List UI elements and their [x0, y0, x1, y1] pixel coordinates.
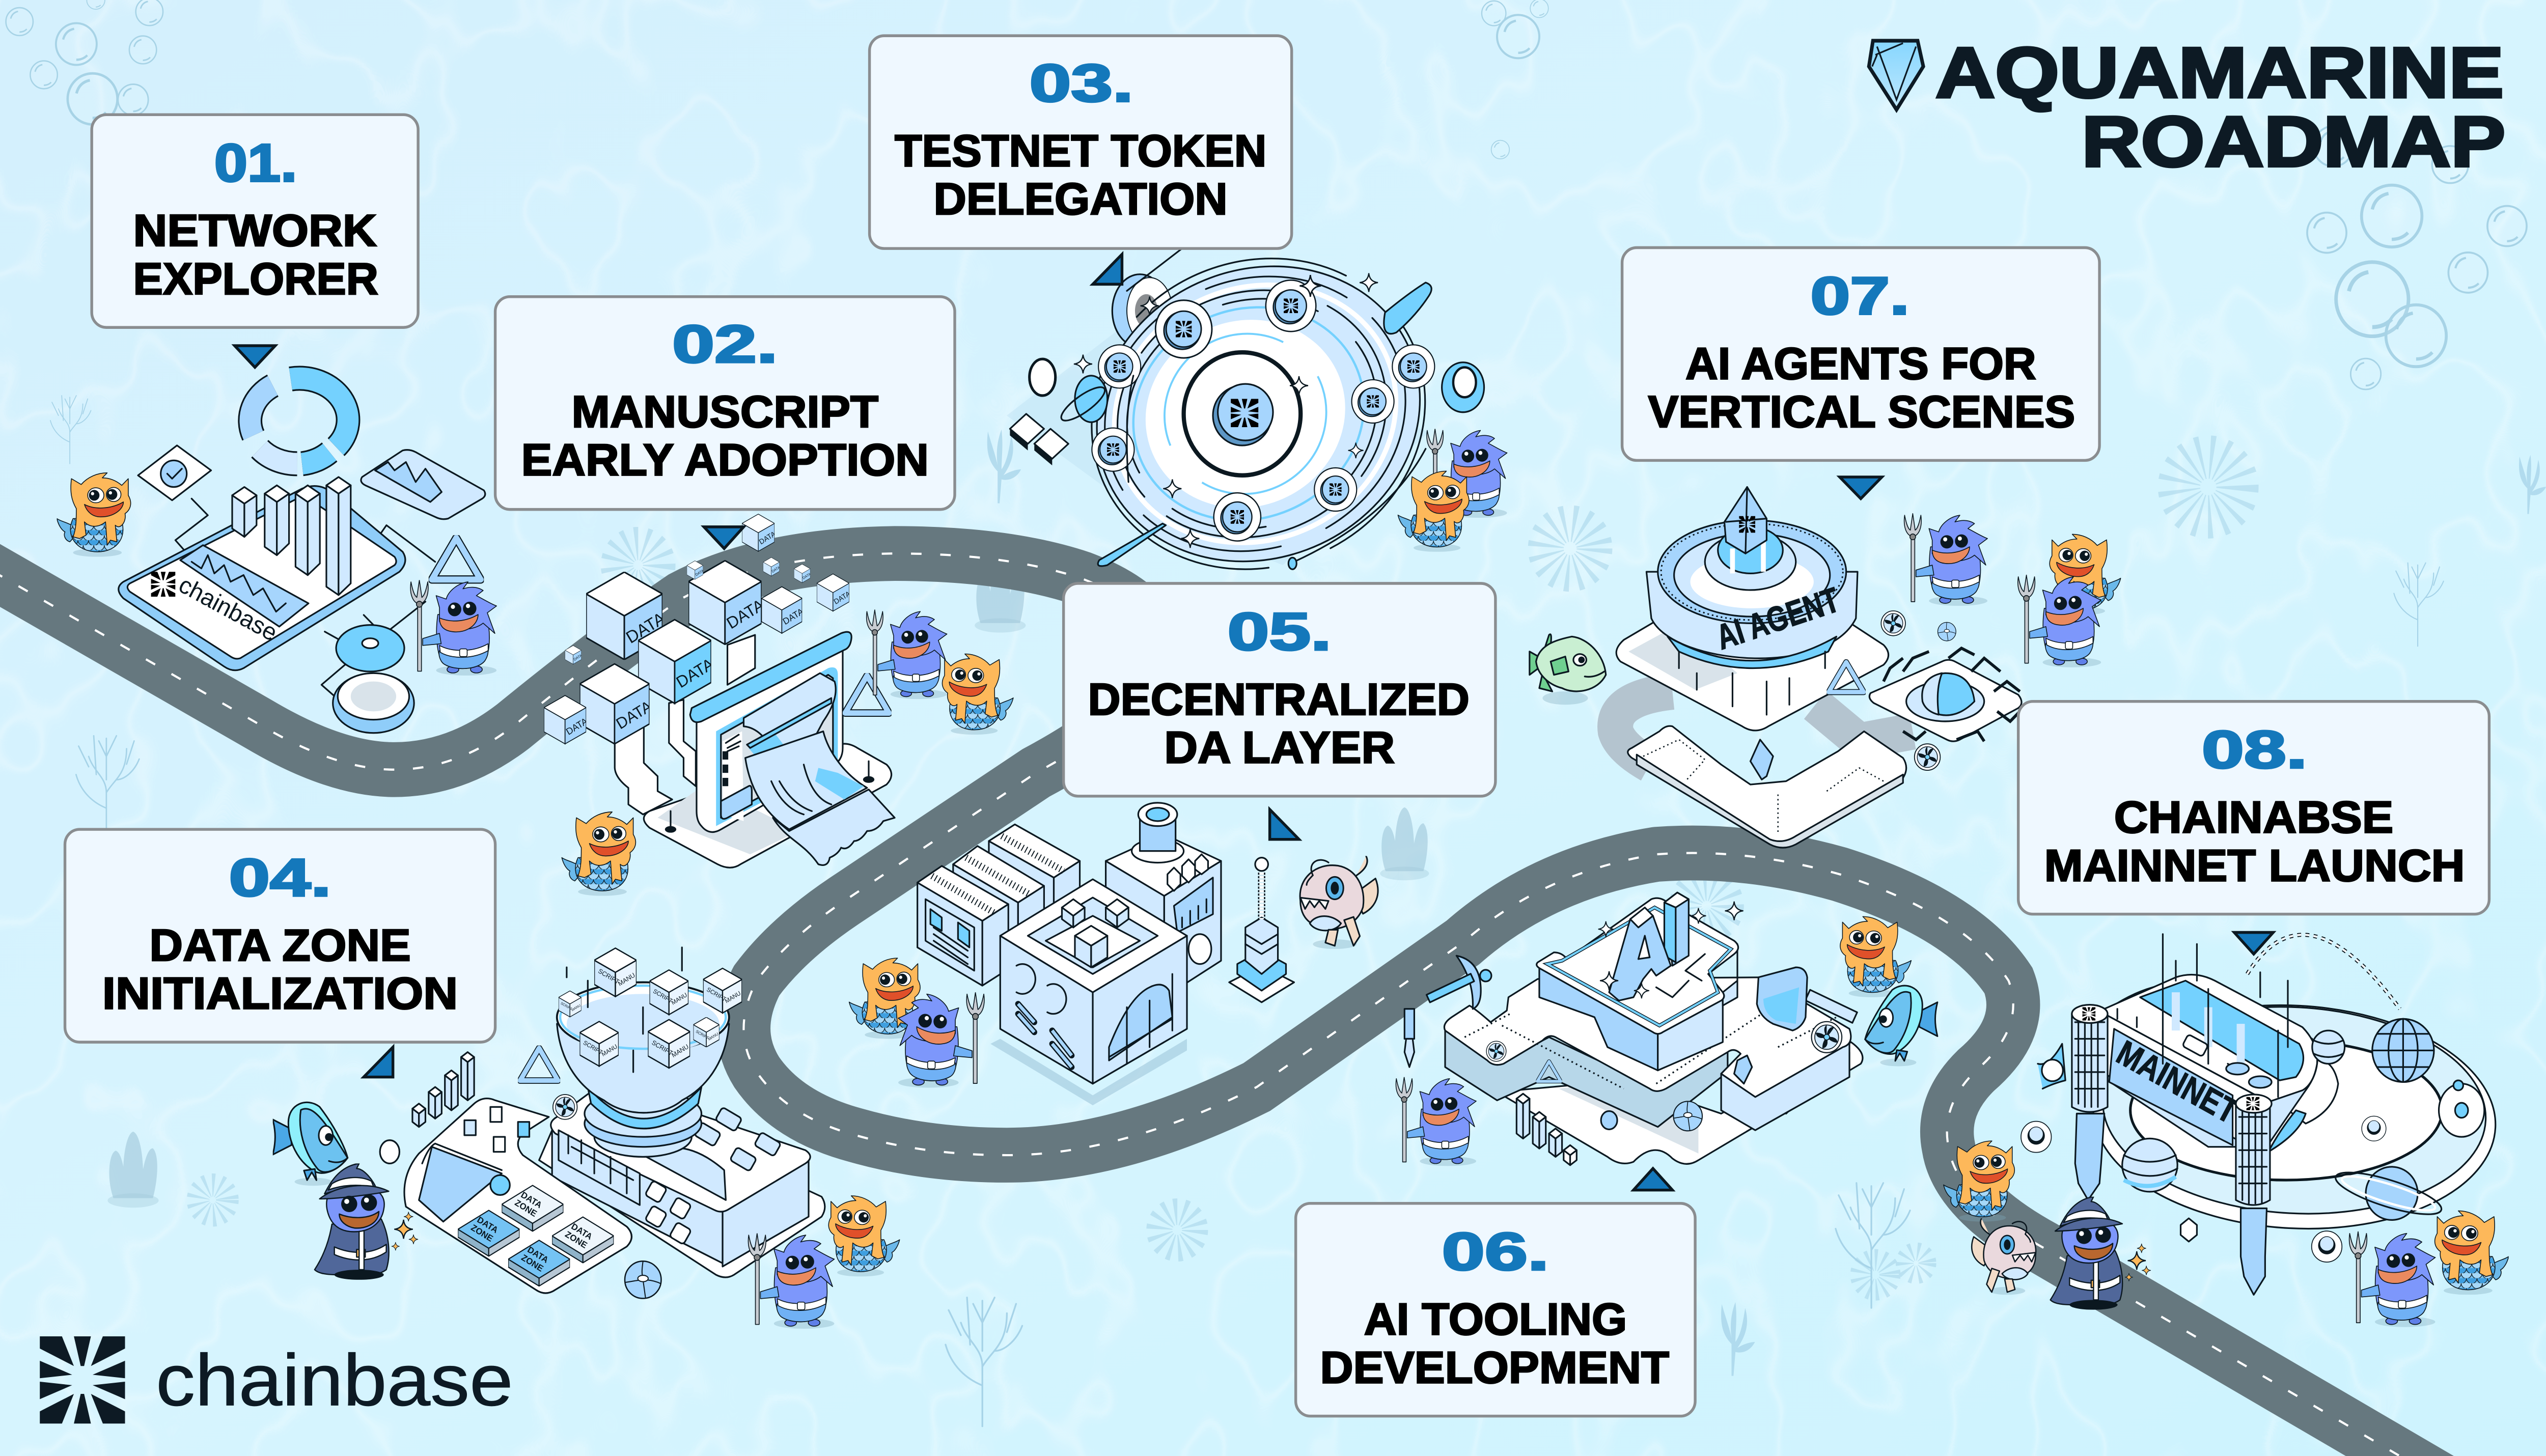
callout 07: AI AGENTS FOR — [1685, 339, 2036, 389]
callout 08: 08. — [2202, 720, 2307, 779]
manuscript cubes — [559, 948, 742, 1068]
AI AGENT label: AI AGENT — [1712, 580, 1844, 657]
connector wires — [175, 498, 435, 705]
floor — [1497, 1042, 1863, 1164]
character: shark 2 — [867, 610, 947, 699]
crystal and triangle — [1537, 1055, 1752, 1131]
diamond plate — [1616, 602, 1889, 731]
sparkles — [1598, 902, 1744, 998]
callout 05: DECENTRALIZED — [1088, 675, 1470, 724]
machine pod and fin arm — [2268, 1060, 2338, 1152]
callout 02: EARLY ADOPTION — [521, 435, 929, 485]
mountain chart tile — [361, 450, 485, 519]
hammer — [1757, 967, 1857, 1030]
fans and ball — [1881, 611, 1956, 770]
callout 06 — [1296, 1203, 1695, 1416]
shadow — [1007, 316, 1429, 565]
tower cylinder — [1646, 487, 1858, 668]
coins — [1092, 280, 1434, 541]
callout 03: 03. — [1030, 53, 1133, 113]
callout 02: MANUSCRIPT — [571, 387, 878, 437]
character: shark 5 — [898, 992, 984, 1088]
blocks — [1010, 414, 1068, 465]
callout 01: 01. — [214, 133, 297, 192]
callout 04: INITIALIZATION — [102, 969, 458, 1019]
title with gem icon: AQUAMARINE — [1935, 33, 2504, 113]
character: shark 6 — [1396, 1077, 1476, 1166]
character: shark 4 — [749, 1234, 834, 1329]
callout 06: DEVELOPMENT — [1320, 1342, 1669, 1393]
fans — [1486, 1022, 1842, 1061]
character: shark 9 — [2349, 1231, 2436, 1327]
character: blue fish 2 — [1865, 986, 1938, 1067]
sparkles — [1074, 273, 1378, 548]
comet lower — [1098, 523, 1166, 566]
small planet — [1030, 359, 1056, 396]
comet upper — [1384, 283, 1431, 334]
fall lines — [2163, 934, 2288, 1063]
scene 08: mainnet launch — [2021, 934, 2501, 1295]
icon: aquamarine gem — [1869, 41, 1923, 109]
character: cat 10 — [2435, 1211, 2509, 1295]
chip with helmet — [1869, 648, 2022, 741]
callout 08 — [2018, 702, 2489, 914]
base plate — [539, 1130, 825, 1277]
main cube — [1000, 879, 1187, 1084]
platform — [644, 744, 892, 867]
screen — [559, 1130, 640, 1205]
planets — [2021, 1019, 2484, 1262]
pointer 05 — [1270, 809, 1299, 839]
character: cat 6 — [849, 958, 920, 1039]
machine body — [2105, 975, 2317, 1147]
egg and ball — [380, 1140, 661, 1298]
chainbase logo: chainbase — [156, 1339, 513, 1421]
pointer 04 — [364, 1047, 393, 1077]
callout 06: 06. — [1442, 1222, 1549, 1281]
triangle ring — [1829, 662, 1864, 692]
callout 03 — [870, 36, 1292, 248]
callout 02 — [495, 297, 955, 510]
orbit platform — [2088, 995, 2501, 1239]
callout 03: DELEGATION — [934, 174, 1228, 224]
title with gem icon — [1869, 33, 2505, 182]
scene 04: data zone console — [380, 947, 825, 1298]
shadows — [990, 1039, 1187, 1105]
callout 07: 07. — [1810, 266, 1910, 325]
character: wizard 1 — [315, 1163, 418, 1280]
character: shark 3 — [1427, 429, 1507, 518]
callout 01 — [92, 115, 418, 327]
ring chart — [250, 378, 348, 464]
antenna — [1229, 858, 1294, 1002]
small rocket — [1404, 1009, 1414, 1067]
callout 07: VERTICAL SCENES — [1648, 387, 2075, 437]
callout 05: 05. — [1228, 602, 1332, 661]
scene 07: AI agents — [1530, 487, 2022, 848]
small buttons — [645, 1181, 691, 1245]
server 2 — [953, 846, 1044, 972]
character: angler fish 2 — [1972, 1218, 2036, 1295]
eye disc — [1112, 274, 1172, 347]
phone: chainbase — [175, 571, 282, 646]
pickaxe — [1427, 956, 1491, 1009]
ringed planet — [1057, 376, 1109, 426]
title with gem icon: ROADMAP — [2082, 102, 2505, 182]
callout 04: DATA ZONE — [149, 920, 411, 970]
cubes — [544, 514, 852, 744]
sliders — [694, 1107, 781, 1171]
character: cat 1 — [57, 473, 131, 557]
callout 02: 02. — [672, 315, 778, 374]
outer swirl rings — [1048, 211, 1468, 617]
control board — [404, 1099, 631, 1293]
triangle ring — [845, 676, 889, 713]
triangle ring — [432, 538, 481, 579]
centre coin — [1213, 384, 1273, 445]
character: cat 3 — [562, 812, 635, 896]
server 1 — [918, 866, 1008, 986]
character: cat 8 — [2050, 534, 2121, 615]
scene 02: manuscript machine — [544, 514, 895, 867]
donut and plate — [333, 625, 414, 733]
callout 05: DA LAYER — [1164, 723, 1395, 773]
ball right — [1442, 362, 1484, 412]
bars — [232, 477, 351, 595]
pointer 06 — [1634, 1168, 1672, 1190]
character: cat 7 — [1840, 916, 1911, 997]
fall lines — [1679, 652, 1825, 715]
callout 01: NETWORK — [133, 206, 377, 256]
upper block walls — [1539, 967, 1658, 1071]
callout 04 — [65, 829, 495, 1042]
orbit marker lines — [1127, 236, 1426, 562]
character: cat 9 — [1944, 1141, 2014, 1222]
gauge — [646, 1148, 726, 1200]
scene 01: network explorer — [119, 378, 485, 733]
pointer 01 — [235, 346, 275, 368]
deck sides — [1445, 1030, 1849, 1130]
character: fish — [273, 1102, 348, 1186]
triangle ring — [520, 1048, 558, 1080]
character: cat 5 — [828, 1196, 900, 1276]
funnel tower — [557, 947, 742, 1157]
scene 05: decentralized DA layer — [918, 803, 1294, 1105]
glass bars — [1516, 1094, 1576, 1165]
character: angler fish — [1300, 856, 1378, 949]
character: shark 8 — [2018, 575, 2101, 667]
green fish — [1530, 634, 1606, 705]
dotted arc — [2247, 935, 2400, 1009]
phone — [119, 486, 405, 670]
callout 05 — [1064, 583, 1496, 796]
callout 01: EXPLORER — [133, 254, 378, 304]
printer panel — [690, 632, 895, 865]
pillars and rockets — [2072, 1005, 2272, 1295]
character: wizard 2 — [2051, 1197, 2151, 1310]
callout 06: AI TOOLING — [1364, 1295, 1627, 1345]
control block — [1106, 803, 1221, 997]
scene 06: AI tooling — [1404, 892, 1863, 1165]
character: cat 4 — [1398, 471, 1469, 552]
white data pipes — [615, 726, 672, 815]
lower crystal — [1751, 740, 1773, 779]
mainnet sign: MAINNET — [2111, 1033, 2244, 1131]
callout 07 — [1622, 247, 2099, 460]
printed paper — [743, 673, 836, 795]
icon: chainbase mark — [40, 1336, 125, 1423]
character: shark 1 — [410, 580, 496, 676]
console body — [551, 1084, 810, 1267]
callout 08: MAINNET LAUNCH — [2044, 841, 2465, 891]
pointer 02 — [704, 527, 743, 548]
envelope check tile — [138, 445, 211, 500]
deck top — [1444, 977, 1851, 1097]
AI letters — [1609, 892, 1689, 1000]
character: shark 7 — [1904, 514, 1987, 606]
pointer 03 — [1093, 255, 1122, 284]
pointer 08 — [2234, 933, 2273, 954]
mini bar chart — [412, 1052, 474, 1127]
chainbase logo — [40, 1336, 513, 1423]
callout 08: CHAINABSE — [2114, 793, 2393, 843]
upper block top — [1537, 898, 1738, 1034]
road — [0, 553, 2468, 1456]
pointer 07 — [1840, 477, 1882, 498]
grey walkway — [1615, 691, 1913, 765]
posts — [665, 761, 874, 833]
callout 04: 04. — [229, 848, 331, 907]
scene 03: token delegation swirl — [1007, 211, 1484, 617]
server 3 — [989, 824, 1080, 939]
character: cat 2 — [942, 654, 1013, 735]
callout 03: TESTNET TOKEN — [895, 126, 1266, 176]
